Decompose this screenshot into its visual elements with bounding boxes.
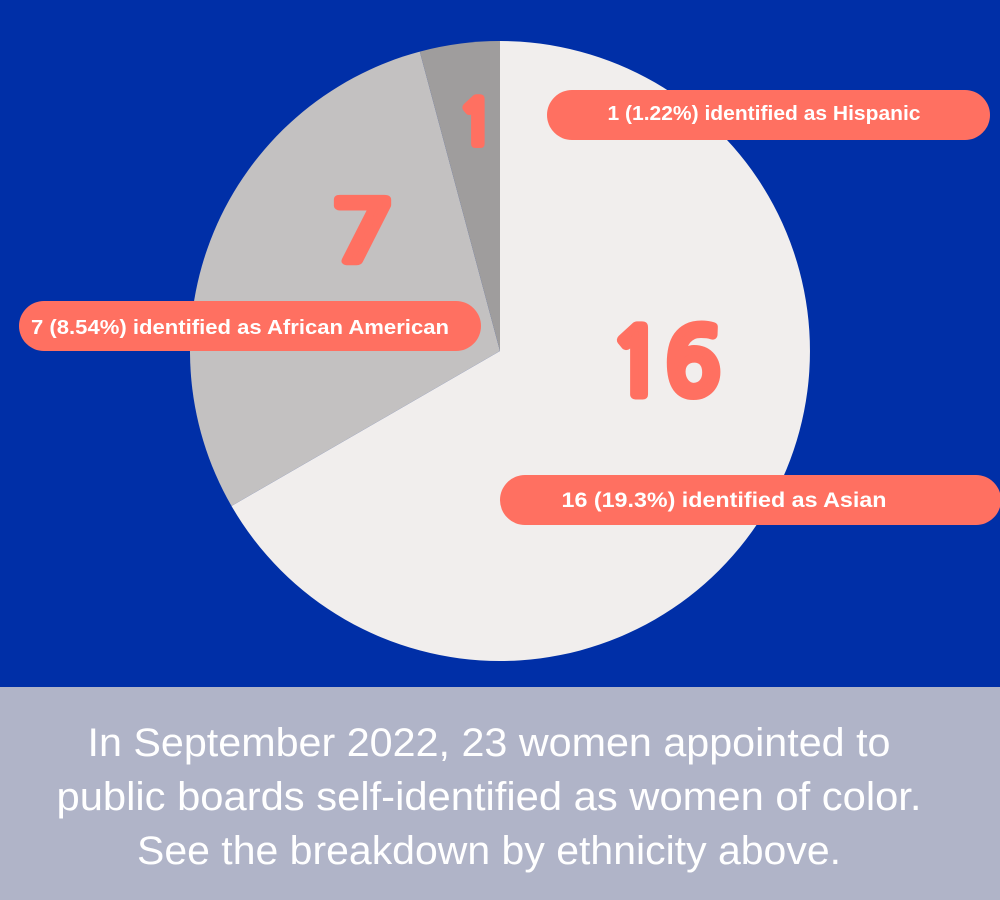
slice: African American	[190, 52, 500, 506]
caption text: In September 2022, 23 women appointed to	[88, 721, 890, 765]
caption panel	[0, 687, 1000, 900]
caption text: public boards self-identified as women of color.	[56, 775, 922, 819]
number: 16: 16	[609, 318, 721, 409]
callout: African American	[19, 301, 481, 351]
caption text: See the breakdown by ethnicity above.	[137, 829, 841, 873]
number: 7: 7	[332, 192, 394, 274]
callout: Hispanic: 1 (1.22%) identified as Hispanic	[608, 103, 920, 125]
slice: Hispanic	[420, 41, 500, 351]
pie chart	[190, 41, 810, 661]
number: 1: 1	[458, 94, 495, 154]
callout: Asian: 16 (19.3%) identified as Asian	[562, 489, 886, 512]
callout: Hispanic	[547, 90, 990, 140]
slice: Asian	[232, 41, 810, 661]
callout: African American: 7 (8.54%) identified as African American	[31, 317, 449, 339]
callout: Asian	[500, 475, 1000, 525]
caption text	[56, 721, 922, 873]
